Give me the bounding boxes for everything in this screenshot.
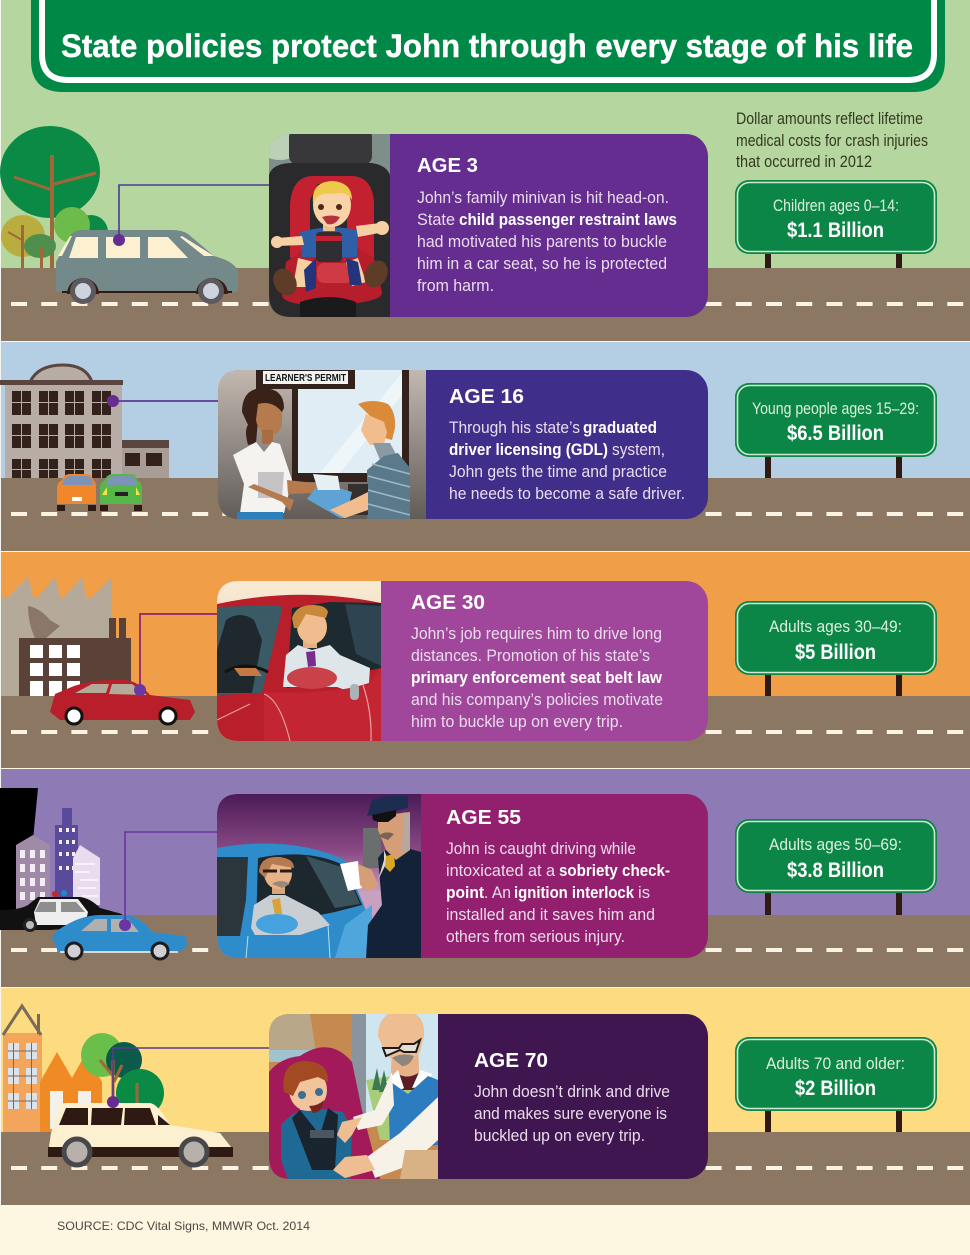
note: dollar amounts: that occurred in 2012	[736, 152, 872, 171]
sign: children: Children ages 0–14:	[773, 196, 899, 215]
band: age 55 sky	[1, 769, 970, 915]
age heading: AGE 55	[446, 807, 521, 829]
panel: age 70	[269, 1010, 708, 1179]
body text: John’s job requires him to drive long	[411, 624, 662, 643]
sign: young people: $6.5 Billion	[787, 422, 884, 445]
connector: red car to photo	[134, 614, 218, 696]
panel: age 30	[217, 581, 708, 741]
sign: adults 30-49	[735, 601, 937, 696]
scene: trees and minivan	[0, 126, 270, 304]
band: age 70 road	[1, 1132, 970, 1205]
scene: houses, trees and station wagon	[3, 1006, 270, 1165]
body text: child passenger restraint laws	[459, 210, 677, 229]
band: age 30 road	[1, 696, 970, 768]
scene: school building and cars	[0, 364, 219, 511]
band: age 3 sky	[1, 0, 970, 268]
panel: age 3	[258, 128, 708, 317]
body text	[474, 1082, 670, 1145]
panel: age 16	[218, 370, 708, 522]
photo: driver buckled up	[217, 581, 381, 741]
connector: wagon to photo	[107, 1048, 270, 1108]
body text: had motivated his parents to buckle	[417, 232, 667, 251]
body text: State	[417, 210, 455, 229]
body text: buckled up on every trip.	[474, 1126, 645, 1145]
body text: others from serious injury.	[446, 927, 625, 946]
body text: and his company’s policies motivate	[411, 690, 663, 709]
car: blue	[52, 915, 188, 959]
sign: adults 50-69: Adults ages 50–69:	[769, 835, 902, 854]
connector: building to photo	[107, 395, 219, 407]
body text	[411, 624, 663, 731]
body text: point	[446, 883, 484, 902]
sign: adults 50-69	[735, 819, 937, 915]
sign: adults 70 and older: $2 Billion	[795, 1077, 876, 1100]
band: age 3 road	[1, 268, 970, 341]
band: age 30 sky	[1, 552, 970, 696]
scene: factory and red car	[1, 577, 218, 724]
sign: adults 50-69: $3.8 Billion	[787, 859, 884, 882]
body text: John is caught driving while	[446, 839, 636, 858]
sign: children	[735, 180, 937, 268]
sign: adults 30-49: Adults ages 30–49:	[769, 617, 902, 636]
body text: ignition interlock	[514, 883, 634, 902]
scene: city and police stop	[0, 788, 218, 959]
body text: system,	[612, 440, 665, 459]
station wagon	[48, 1103, 233, 1165]
photo: learner's permit	[218, 370, 426, 522]
age heading: AGE 3	[417, 155, 478, 177]
body text: John’s family minivan is hit head-on.	[417, 188, 669, 207]
sign: adults 30-49: $5 Billion	[795, 641, 876, 664]
body text: him in a car seat, so he is protected	[417, 254, 667, 273]
body text: graduated	[583, 418, 657, 437]
age heading: AGE 16	[449, 386, 524, 408]
body text: John doesn’t drink and drive	[474, 1082, 670, 1101]
band: age 16 road	[1, 478, 970, 551]
sign: young people: Young people ages 15–29:	[752, 399, 919, 418]
title text: State policies protect John through every stage of his life	[61, 28, 913, 64]
body text: primary enforcement seat belt law	[411, 668, 663, 687]
band: age 70 sky	[1, 988, 970, 1132]
body text	[446, 839, 670, 946]
connector: minivan to photo	[113, 185, 270, 246]
body text: driver licensing (GDL)	[449, 440, 608, 459]
body text: he needs to become a safe driver.	[449, 484, 685, 503]
note: dollar amounts: medical costs for crash injuries	[736, 131, 928, 150]
body text: him to buckle up on every trip.	[411, 712, 623, 731]
car: red	[50, 680, 195, 724]
sign text: LEARNER'S PERMIT	[265, 373, 346, 384]
car: orange	[57, 474, 96, 511]
photo: grandfather buckling boy	[269, 1010, 438, 1179]
sign: children: $1.1 Billion	[787, 219, 884, 242]
body text: installed and it saves him and	[446, 905, 655, 924]
source line: SOURCE: CDC Vital Signs, MMWR Oct. 2014	[57, 1219, 310, 1233]
body text: distances. Promotion of his state’s	[411, 646, 650, 665]
body text: . An	[484, 883, 511, 902]
body text: and makes sure everyone is	[474, 1104, 667, 1123]
sign: young people	[735, 383, 937, 478]
body text	[449, 418, 685, 503]
minivan	[56, 230, 238, 304]
age heading: AGE 30	[411, 592, 485, 614]
band: age 16 sky	[1, 342, 970, 478]
title sign	[31, 0, 945, 92]
body text: intoxicated at a	[446, 861, 556, 880]
photo: toddler in car seat	[269, 134, 390, 317]
photo: sobriety checkpoint	[217, 794, 421, 958]
police car	[0, 890, 122, 932]
note: dollar amounts	[736, 109, 928, 171]
body text: from harm.	[417, 276, 494, 295]
body text: Through his state’s	[449, 418, 580, 437]
sign: adults 70 and older: Adults 70 and older:	[766, 1054, 905, 1073]
body text: John gets the time and practice	[449, 462, 667, 481]
car: green	[100, 474, 142, 511]
body text: is	[638, 883, 650, 902]
connector: blue car to photo	[119, 832, 218, 931]
note: dollar amounts: Dollar amounts reflect lifetime	[736, 109, 923, 128]
body text	[417, 188, 677, 295]
panel: age 55	[217, 794, 708, 958]
age heading: AGE 70	[474, 1050, 548, 1072]
sign: adults 70 and older	[735, 1037, 937, 1132]
body text: sobriety check-	[559, 861, 670, 880]
band: age 55 road	[1, 915, 970, 987]
